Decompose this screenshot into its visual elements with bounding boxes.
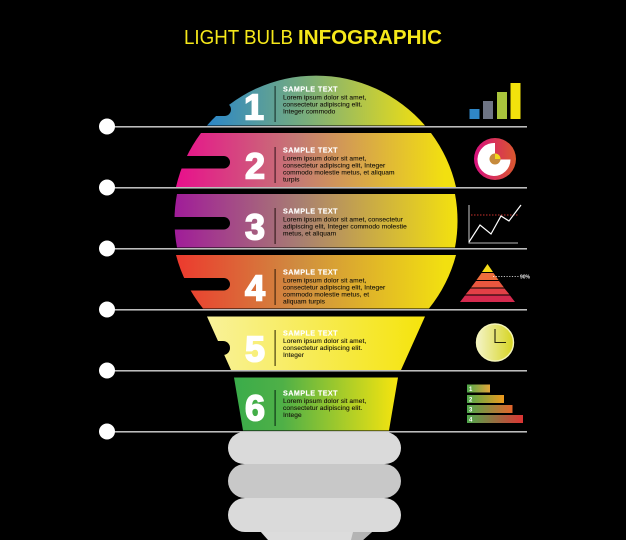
segment 1 notch [100,103,231,116]
text block 3: SAMPLE TEXT [283,206,338,216]
segment 1 shape [207,76,425,126]
timeline dots [99,118,115,440]
text block 3 [283,206,407,238]
text block 5: Lorem ipsum dolor sit amet, [283,338,366,345]
text block 5 [283,328,366,359]
text block 6: SAMPLE TEXT [283,388,338,398]
text block 2: turpis [283,176,300,184]
segment 4 [100,255,456,308]
divider 6 [274,390,276,426]
icon: horizontal bars: 4 [469,418,473,424]
text block 4 [283,268,386,306]
segment 6 [234,378,398,430]
text block 4: commodo molestie metus, et [283,292,369,298]
text block 1: consectetur adipiscing elit. [283,102,362,108]
title: LIGHT BULB [184,27,293,49]
text block 4: consectetur adipiscing elit, Integer [283,284,386,292]
icon: line chart [469,205,521,243]
text block 1 [283,84,366,116]
text block 2: consectetur adipiscing elit, Integer [283,162,386,170]
number 1: 1 [244,86,264,128]
icon: horizontal bars [467,384,523,424]
icon: horizontal bars: 3 [469,408,473,414]
text block 6: Lorem ipsum dolor sit amet, [283,398,366,405]
text block 2: SAMPLE TEXT [283,146,338,154]
text block 2 [283,146,395,184]
title: INFOGRAPHIC [298,27,442,49]
segment 4 shape [176,255,456,308]
segment 5 shape [207,316,425,370]
segment 6 shape [234,378,398,430]
text block 1: Lorem ipsum dolor sit amet, [283,94,366,102]
number 6: 6 [245,388,265,428]
divider 2 [274,147,276,183]
segment 5 notch [100,341,230,355]
text block 1: Integer commodo [283,108,336,116]
number 2: 2 [245,146,265,186]
icon: bar chart [470,83,520,119]
text block 4: SAMPLE TEXT [283,268,338,276]
icon: horizontal bars: 2 [469,398,473,404]
text block 2: Lorem ipsum dolor sit amet, [283,156,366,162]
divider 4 [274,269,276,305]
text block 5: consectetur adipiscing elit. [283,345,362,352]
icon: donut chart [474,138,516,180]
text block 2: commodo molestie metus, et aliquam [283,170,395,176]
text block 5: SAMPLE TEXT [283,328,338,338]
text block 4: Lorem ipsum dolor sit amet, [283,278,366,284]
timeline rules [115,127,527,432]
divider 3 [274,208,276,244]
segment 3 [100,194,458,248]
number 3: 3 [245,206,265,248]
segment 1 [100,76,425,128]
text block 6: consectetur adipiscing elit. [283,405,362,412]
text block 5: Integer [283,352,305,359]
text block 3: adipiscing elit, Integer commodo molestie [283,224,407,230]
text block 3: Lorem ipsum dolor sit amet, consectetur [283,216,404,224]
number 4: 4 [245,268,265,308]
segment 3 notch [100,217,230,230]
bulb base [228,432,401,540]
segment 4 notch [100,278,230,290]
icon: horizontal bars: 1 [469,387,473,393]
text block 6: Intege [283,412,302,419]
icon: clock [476,324,514,361]
icon: pyramid: 90% [520,274,531,280]
text block 1: SAMPLE TEXT [283,84,338,94]
divider 5 [274,330,276,366]
segment 2 shape [176,133,456,187]
text block 3: metus, et aliquam [283,230,337,238]
icon: pyramid [460,264,531,302]
divider 1 [274,86,276,122]
number 5: 5 [245,328,265,370]
segment 2 notch [100,156,230,168]
text block 4: aliquam turpis [283,298,326,306]
segment 2 [100,133,456,187]
segment 5 [100,316,425,370]
segment 3 shape [174,194,458,248]
text block 6 [283,388,366,419]
